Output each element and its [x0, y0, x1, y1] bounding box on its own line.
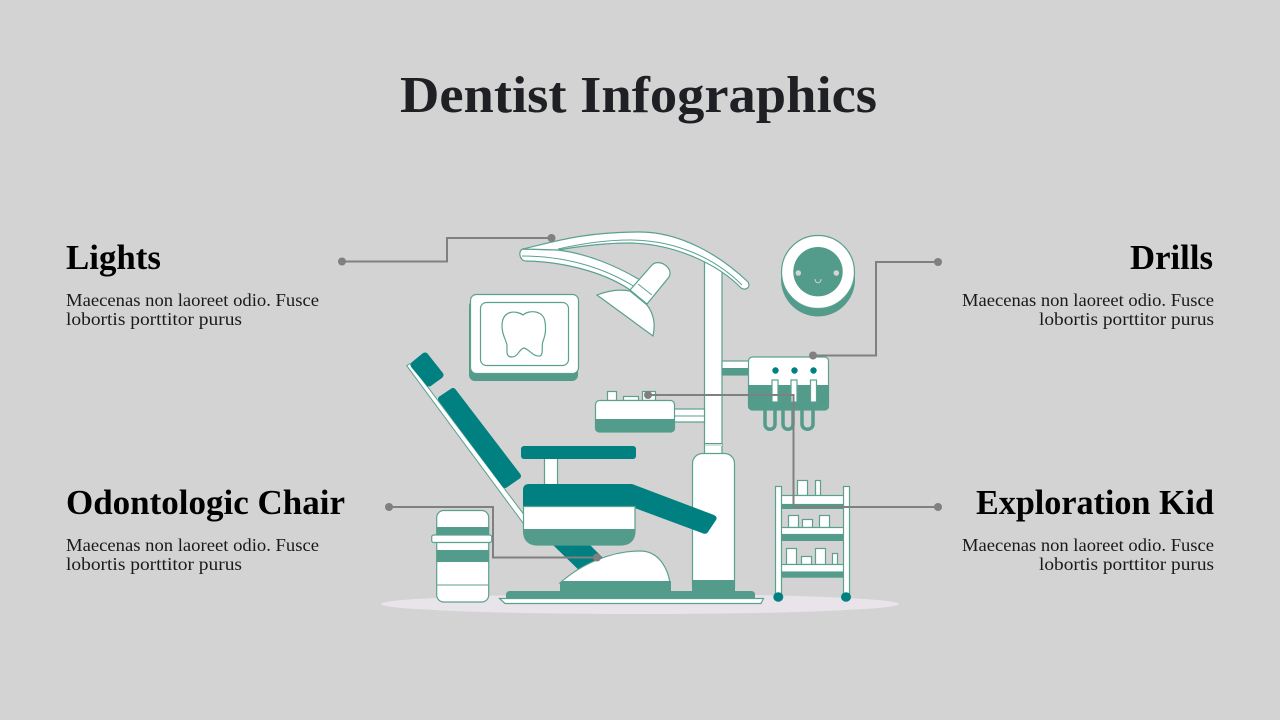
text block: exploration kid: Maecenas non laoreet odio. Fusce	[962, 535, 1214, 555]
text block: odontologic chair	[66, 483, 345, 574]
text block: odontologic chair: lobortis porttitor purus	[66, 554, 242, 574]
title: Dentist Infographics	[400, 67, 877, 124]
pole base	[692, 454, 735, 598]
text block: odontologic chair: Odontologic Chair	[66, 483, 345, 522]
x-ray monitor with tooth	[469, 294, 578, 381]
text block: odontologic chair: Maecenas non laoreet odio. Fusce	[66, 535, 319, 555]
text block: exploration kid: lobortis porttitor purus	[1039, 554, 1214, 574]
chair column	[553, 545, 611, 576]
exploration kit cart	[773, 480, 851, 602]
middle shelf items	[781, 516, 844, 541]
icon: tooth	[502, 312, 546, 357]
armrest	[521, 446, 636, 486]
pole	[704, 262, 722, 454]
connector: drills	[809, 258, 942, 360]
lamp arm	[520, 232, 749, 292]
illustration: dental unit	[520, 232, 829, 598]
floor ellipse	[381, 594, 899, 614]
tool arm connectors	[674, 361, 749, 422]
text block: lights: Lights	[66, 238, 161, 277]
posts and wheels	[773, 486, 851, 602]
text block: lights: lobortis porttitor purus	[66, 309, 242, 329]
icon: wall face mirror	[781, 236, 855, 316]
seat base	[523, 506, 636, 546]
top shelf items	[781, 480, 844, 509]
text block: drills: lobortis porttitor purus	[1039, 309, 1214, 329]
text block: drills	[962, 238, 1214, 329]
bottom shelf items	[781, 548, 844, 578]
jar	[432, 510, 492, 602]
connector: exploration kid	[644, 391, 942, 511]
tray with instruments	[595, 392, 675, 432]
text block: exploration kid	[962, 483, 1215, 574]
text block: drills: Drills	[1130, 238, 1213, 277]
chair foot	[560, 551, 671, 592]
chair back board	[407, 364, 528, 527]
text block: lights	[66, 238, 319, 329]
seat	[523, 484, 717, 534]
backrest	[441, 391, 518, 485]
text block: drills: Maecenas non laoreet odio. Fusce	[962, 290, 1214, 310]
dental chair	[407, 356, 764, 604]
drills hoses	[765, 408, 813, 429]
text block: exploration kid: Exploration Kid	[976, 483, 1215, 522]
floor plate	[500, 591, 764, 604]
headrest	[414, 356, 440, 383]
dental lamp	[597, 263, 670, 336]
text block: lights: Maecenas non laoreet odio. Fusce	[66, 290, 319, 310]
connector: lights	[338, 234, 556, 266]
connector: odontologic chair	[385, 503, 601, 562]
drills unit	[748, 357, 829, 410]
